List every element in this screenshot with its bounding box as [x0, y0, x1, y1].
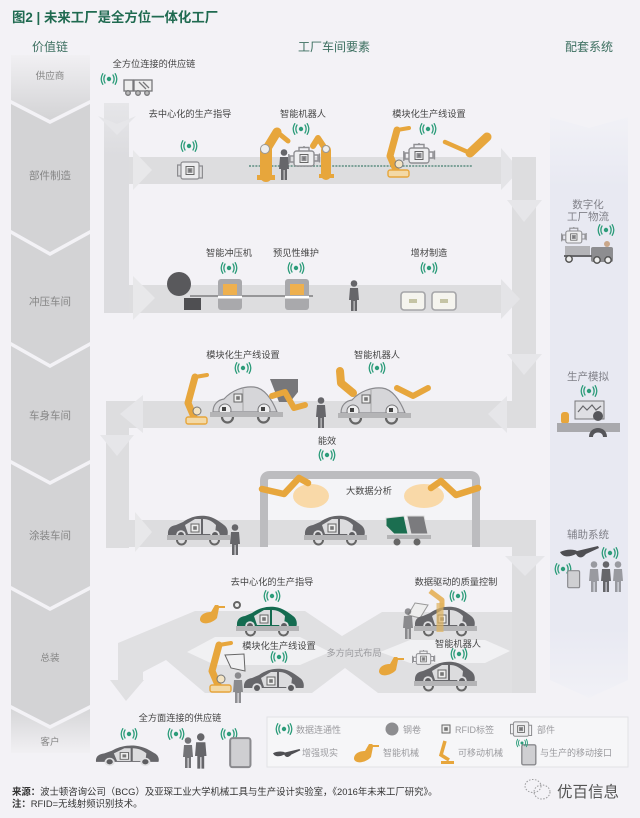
chevron: final assembly	[11, 590, 90, 725]
chevron: final assembly: 总装	[40, 652, 60, 664]
legend: data connectivity	[276, 724, 341, 735]
chevron: parts manufacturing	[11, 104, 90, 252]
legend: smart machinery: 智能机械	[383, 747, 419, 758]
item: smart robot, assembly: 智能机器人	[435, 638, 481, 649]
customers	[183, 733, 206, 769]
icon: truck	[124, 80, 152, 95]
item: customer connected	[96, 712, 250, 769]
operator	[589, 411, 607, 437]
panel: supporting systems column	[550, 117, 628, 698]
panel: value chain chevrons	[11, 55, 90, 753]
item: modular line, row 3: 模块化生产线设置	[206, 349, 280, 360]
item: data-driven quality control: 数据驱动的质量控制	[415, 576, 497, 587]
robot arm right	[313, 138, 334, 178]
paint shop cars	[167, 516, 431, 555]
press 2	[285, 279, 309, 310]
item: decentralized production guidance, row 1: 去中心化的生产指导	[149, 108, 231, 119]
item: modular line, assembly	[210, 640, 316, 703]
gantry arms	[262, 478, 478, 495]
column heading: factory elements: 工厂车间要素	[298, 39, 370, 54]
legend: mobile interface: 与生产的移动接口	[540, 747, 612, 758]
item: decentralized guidance, assembly: 去中心化的生产指导	[231, 576, 313, 587]
item: production simulation: 生产模拟	[567, 370, 609, 383]
conveyor dotted line	[249, 165, 473, 167]
item: smart robots, row 3: 智能机器人	[354, 349, 400, 360]
item: smart press row 2: 智能冲压机	[206, 247, 252, 258]
item: supply chain connected: 全方位连接的供应链	[113, 58, 195, 69]
item: smart robots, row 1	[257, 108, 334, 180]
title: 图2 | 未来工厂是全方位一体化工厂	[12, 9, 218, 25]
item: smart press row 2	[167, 247, 359, 311]
long orange arm	[445, 137, 487, 153]
item: additive manufacturing	[401, 247, 456, 310]
legend: data connectivity: 数据连通性	[296, 724, 341, 735]
legend: part	[511, 722, 555, 736]
item: paint gantry	[262, 475, 478, 547]
item: energy efficiency	[318, 435, 336, 460]
spray blobs	[293, 484, 329, 508]
chevron: supplier: 供应商	[36, 70, 65, 82]
legend: RFID tag: RFID标签	[455, 724, 494, 735]
legend: steel coil	[386, 722, 421, 736]
legend: smart machinery	[354, 744, 419, 762]
item: digital logistics	[562, 198, 614, 263]
legend: mobile machinery: 可移动机械	[458, 747, 503, 758]
item: modular line, row 1: 模块化生产线设置	[392, 108, 466, 119]
chevron: stamping	[11, 234, 90, 364]
doors on carrier	[386, 516, 431, 546]
item: customer connected: 全方面连接的供应链	[139, 712, 221, 723]
item: digital logistics: 数字化	[572, 198, 604, 211]
column heading: value chain: 价值链	[32, 39, 68, 54]
item: auxiliary systems	[555, 528, 623, 592]
chevron: body shop	[11, 346, 90, 481]
press 1	[218, 279, 242, 310]
item: digital logistics: 工厂物流	[567, 210, 609, 223]
watermark	[525, 780, 619, 801]
item: modular line, assembly: 模块化生产线设置	[242, 640, 316, 651]
item: smart robots, row 3	[338, 349, 428, 424]
item: smart robot, assembly	[379, 638, 481, 690]
item: paint gantry: 大数据分析	[346, 485, 392, 496]
chevron: customer: 客户	[40, 736, 60, 748]
item: supply chain connected	[101, 58, 195, 95]
label: multi-directional layout: 多方向式布局	[326, 647, 382, 658]
item: decentralized production guidance, row 1	[149, 108, 231, 179]
watermark: 优百信息	[557, 783, 619, 801]
item: data-driven quality control	[403, 576, 497, 639]
source note: 注：RFID=无线射频识别技术。	[12, 798, 142, 809]
item: energy efficiency: 能效	[318, 435, 336, 446]
coil	[167, 272, 191, 296]
legend	[267, 717, 628, 767]
automated cart	[564, 241, 613, 263]
source note: 来源：波士顿咨询公司（BCG）及亚琛工业大学机械工具与生产设计实验室，《2016年未来工厂研究》。	[12, 786, 438, 797]
icon: chat bubbles	[525, 780, 550, 799]
item: smart robots, row 1: 智能机器人	[280, 108, 326, 119]
column heading: supporting systems: 配套系统	[565, 40, 613, 54]
item: decentralized guidance, assembly	[200, 576, 313, 636]
chevron: customer	[11, 709, 90, 753]
label: predictive maintenance: 预见性维护	[273, 247, 319, 258]
chevron: stamping: 冲压车间	[29, 295, 71, 308]
item: modular line, row 3	[186, 349, 326, 428]
chevron: supplier	[11, 55, 90, 120]
hopper	[270, 379, 298, 402]
source note	[12, 786, 438, 809]
item: modular line, row 1	[388, 108, 487, 177]
legend: mobile interface	[517, 739, 612, 765]
legend: RFID tag	[442, 724, 494, 735]
item: production simulation	[557, 370, 620, 437]
robot arm left	[257, 132, 288, 180]
chevron: paint shop	[11, 464, 90, 607]
legend: steel coil: 钢卷	[403, 724, 421, 735]
legend: augmented reality: 增强现实	[302, 747, 338, 758]
legend: augmented reality	[273, 747, 338, 758]
panel: factory flow path	[98, 103, 545, 701]
flow: assembly crossover band	[110, 611, 512, 701]
item: auxiliary systems: 辅助系统	[567, 528, 609, 541]
chevron: body shop: 车身车间	[29, 409, 71, 422]
chevron: parts manufacturing: 部件制造	[29, 169, 71, 182]
legend: mobile machinery	[441, 741, 503, 764]
legend: part: 部件	[537, 724, 555, 735]
chevron: paint shop: 涂装车间	[29, 529, 71, 542]
item: additive manufacturing: 增材制造	[411, 247, 447, 258]
